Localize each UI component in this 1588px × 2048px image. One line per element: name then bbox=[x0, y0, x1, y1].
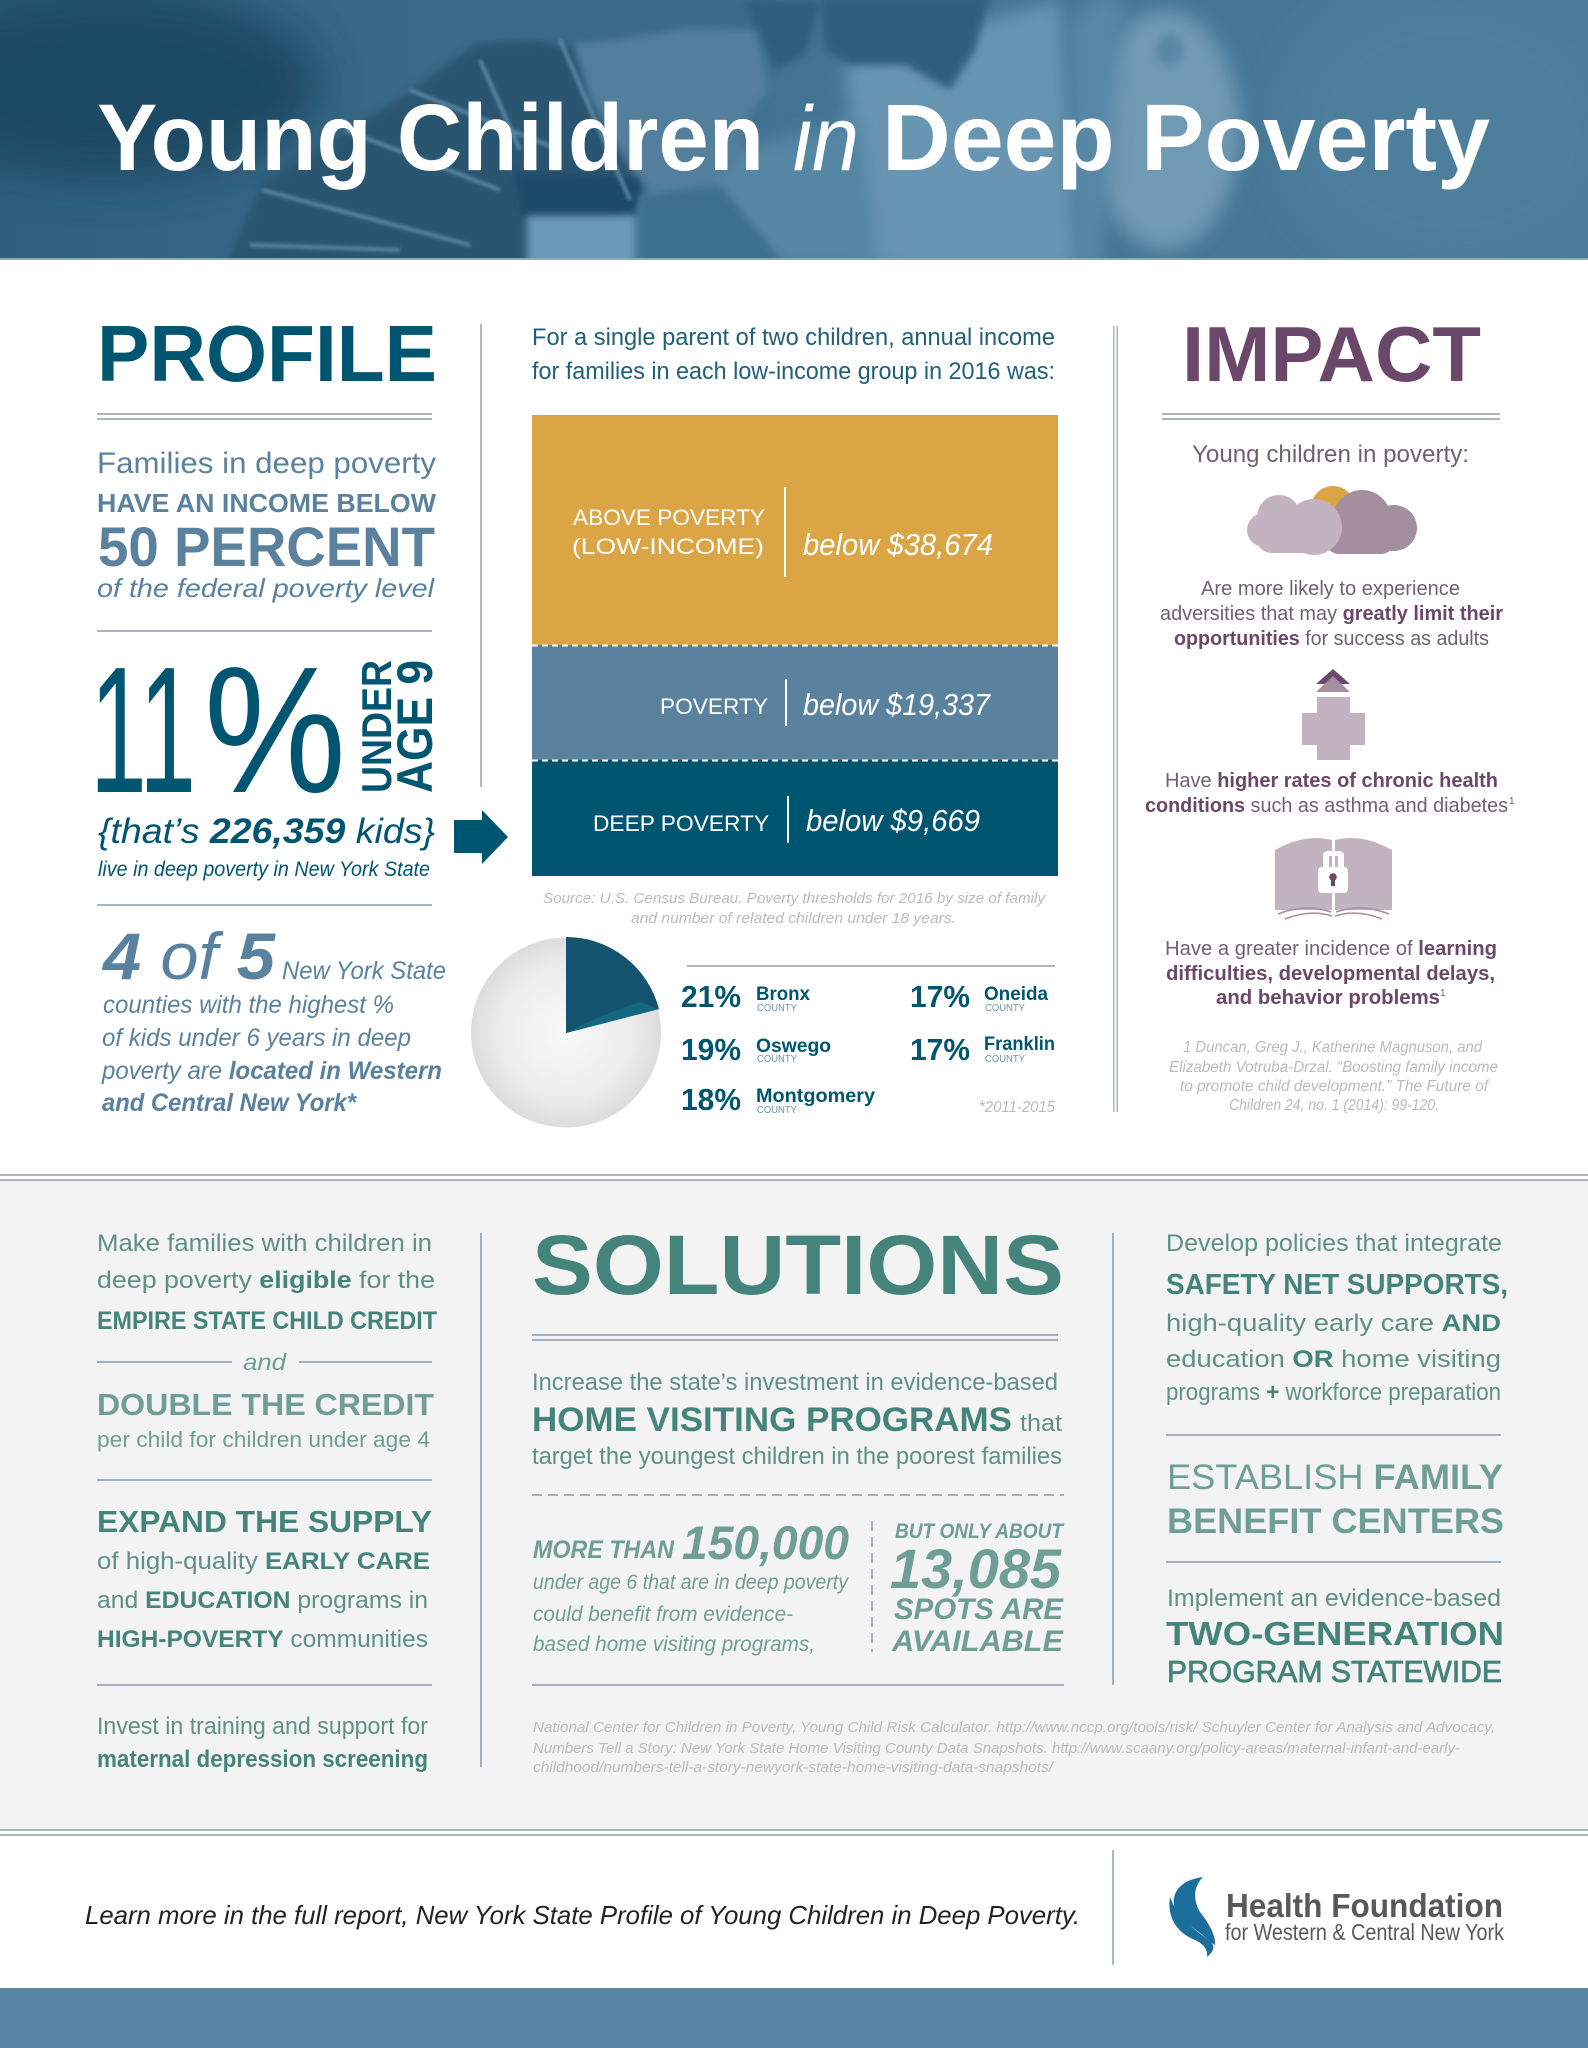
stat: 13,085: AVAILABLE bbox=[891, 1625, 1064, 1658]
big stat: 11 percent: 11 bbox=[90, 630, 196, 831]
solutions: right column bbox=[1166, 1230, 1508, 1689]
stat: 4 of 5 counties bbox=[101, 919, 446, 1117]
tax credit recommendation: and bbox=[243, 1349, 287, 1375]
learning text: difficulties, developmental delays, bbox=[1166, 962, 1495, 985]
county stats: 18% bbox=[681, 1082, 741, 1117]
footnote: Elizabeth Votruba-Drzal. “Boosting family income bbox=[1169, 1059, 1498, 1076]
county stats: Bronx bbox=[756, 984, 810, 1005]
county stats bbox=[681, 965, 1055, 1117]
chronic health text bbox=[1145, 769, 1515, 817]
title: in bbox=[793, 88, 859, 190]
big stat: 11 percent: % bbox=[204, 630, 346, 831]
adversities text: opportunities for success as adults bbox=[1174, 627, 1489, 650]
income intro bbox=[532, 324, 1055, 385]
band: deep poverty: below $9,669 bbox=[806, 803, 980, 838]
learning text: Have a greater incidence of learning bbox=[1165, 937, 1497, 960]
tax credit recommendation: per child for children under age 4 bbox=[97, 1427, 430, 1452]
tax credit recommendation bbox=[97, 1230, 437, 1452]
band: above poverty: ABOVE POVERTY bbox=[573, 505, 765, 530]
tax credit recommendation: deep poverty eligible for the bbox=[97, 1267, 435, 1294]
band: deep poverty bbox=[532, 760, 1058, 876]
county stats: Franklin bbox=[984, 1034, 1055, 1055]
panel: impact: Young children in poverty: bbox=[1192, 441, 1469, 468]
deep poverty definition: Families in deep poverty bbox=[97, 447, 436, 480]
tax credit recommendation: EMPIRE STATE CHILD CREDIT bbox=[97, 1307, 437, 1335]
references: childhood/numbers-tell-a-story-newyork-state-home-visiting-data-snapshots/ bbox=[533, 1759, 1055, 1776]
stat: 13,085: SPOTS ARE bbox=[894, 1593, 1064, 1626]
source note: Source: U.S. Census Bureau. Poverty thresholds for 2016 by size of family bbox=[543, 890, 1047, 907]
band: poverty: POVERTY bbox=[660, 694, 768, 719]
footnote bbox=[1169, 1039, 1498, 1114]
references: Numbers Tell a Story: New York State Home Visiting County Data Snapshots. http://www.scaany.org/policy-areas/maternal-infant-and-early- bbox=[533, 1740, 1460, 1757]
stat: 4 of 5 counties: counties with the highest % bbox=[103, 991, 394, 1019]
panel: solutions background bbox=[0, 1174, 1588, 1836]
expand the supply: of high-quality EARLY CARE bbox=[97, 1548, 430, 1575]
home visiting recommendation: HOME VISITING PROGRAMS bbox=[532, 1401, 1012, 1439]
county stats: 21% bbox=[681, 979, 741, 1014]
family benefit centers: ESTABLISH FAMILY bbox=[1167, 1458, 1503, 1497]
stat: 4 of 5 counties: poverty are located in Western bbox=[101, 1057, 442, 1085]
home visiting recommendation: Increase the state’s investment in evidence-based bbox=[532, 1369, 1058, 1396]
band: poverty bbox=[532, 645, 1058, 760]
two-generation program: TWO-GENERATION bbox=[1166, 1615, 1504, 1652]
heading: solutions: SOLUTIONS bbox=[532, 1218, 1064, 1312]
source note bbox=[543, 890, 1047, 927]
stat: 4 of 5 counties: of kids under 6 years in deep bbox=[102, 1024, 411, 1052]
county stats: 17% bbox=[910, 1032, 970, 1067]
learning text: 1 bbox=[1440, 988, 1446, 999]
heading: profile: PROFILE bbox=[97, 309, 437, 398]
heading: impact: IMPACT bbox=[1182, 310, 1481, 398]
big stat: 11 percent: live in deep poverty in New York State bbox=[98, 858, 430, 881]
family benefit centers bbox=[1167, 1458, 1504, 1541]
big stat: 11 percent: {that’s 226,359 kids} bbox=[98, 812, 435, 851]
county stats: Montgomery bbox=[756, 1086, 875, 1107]
references: National Center for Children in Poverty, Young Child Risk Calculator. http://www.nccp.org/tools/risk/ Schuyler Center for Analysis and Advocacy, bbox=[533, 1719, 1495, 1736]
income intro: For a single parent of two children, annual income bbox=[532, 324, 1055, 351]
stat: 150,000: could benefit from evidence- bbox=[533, 1603, 793, 1626]
learning text: and behavior problems bbox=[1216, 986, 1440, 1009]
footnote: to promote child development.” The Future of bbox=[1180, 1078, 1490, 1095]
logo: Health Foundation: Health Foundation bbox=[1226, 1887, 1503, 1924]
deep poverty definition: of the federal poverty level bbox=[97, 573, 435, 603]
chronic health text: conditions such as asthma and diabetes bbox=[1145, 794, 1508, 817]
county stats: *2011-2015 bbox=[979, 1099, 1055, 1116]
logo: Health Foundation bbox=[1169, 1877, 1504, 1957]
icon: cloud and sun bbox=[1247, 486, 1417, 555]
deep poverty definition: HAVE AN INCOME BELOW bbox=[97, 488, 436, 518]
county stats: COUNTY bbox=[757, 1054, 797, 1065]
county stats: COUNTY bbox=[757, 1003, 797, 1014]
arrow bbox=[454, 810, 508, 864]
panel: impact bbox=[1145, 310, 1515, 1114]
stat: 150,000: MORE THAN bbox=[533, 1536, 675, 1564]
safety net recommendation bbox=[1166, 1230, 1508, 1406]
depression screening: maternal depression screening bbox=[97, 1746, 428, 1773]
title: Deep Poverty bbox=[882, 85, 1490, 191]
two-generation program: PROGRAM STATEWIDE bbox=[1167, 1654, 1502, 1689]
title: Young Children bbox=[97, 85, 764, 191]
expand the supply: HIGH-POVERTY communities bbox=[97, 1626, 428, 1653]
home visiting recommendation: target the youngest children in the poorest families bbox=[532, 1443, 1062, 1470]
band: poverty: below $19,337 bbox=[803, 687, 992, 722]
family benefit centers: BENEFIT CENTERS bbox=[1167, 1502, 1504, 1541]
big stat: 11 percent bbox=[90, 630, 443, 881]
deep poverty definition: 50 PERCENT bbox=[98, 515, 435, 578]
big stat: 11 percent: UNDER bbox=[353, 660, 400, 793]
county stats: 19% bbox=[681, 1032, 741, 1067]
income intro: for families in each low-income group in 2016 was: bbox=[532, 358, 1055, 385]
depression screening: Invest in training and support for bbox=[97, 1713, 428, 1740]
footer band bbox=[0, 1988, 1588, 2048]
stat: 150,000 bbox=[533, 1516, 849, 1656]
icon: locked book bbox=[1275, 838, 1392, 919]
depression screening bbox=[97, 1713, 428, 1773]
logo: Health Foundation: for Western & Central New York bbox=[1225, 1919, 1504, 1945]
stat: 4 of 5 counties: 4 of 5 bbox=[101, 919, 276, 993]
band: above poverty: (LOW-INCOME) bbox=[572, 534, 764, 559]
safety net recommendation: Develop policies that integrate bbox=[1166, 1230, 1502, 1257]
county stats: Oneida bbox=[984, 984, 1048, 1005]
pie chart bbox=[471, 937, 661, 1128]
panel: profile bbox=[90, 309, 446, 1117]
footnote: Children 24, no. 1 (2014): 99-120. bbox=[1229, 1097, 1439, 1114]
county stats: COUNTY bbox=[985, 1003, 1025, 1014]
band: above poverty bbox=[532, 415, 1058, 645]
band: above poverty: below $38,674 bbox=[803, 527, 993, 562]
deep poverty definition bbox=[97, 447, 436, 603]
tax credit recommendation: Make families with children in bbox=[97, 1230, 432, 1257]
big stat: 11 percent: AGE 9 bbox=[387, 660, 443, 793]
expand the supply: EXPAND THE SUPPLY bbox=[97, 1504, 432, 1539]
title bbox=[97, 85, 1490, 191]
chronic health text: Have higher rates of chronic health bbox=[1165, 769, 1498, 792]
solutions: left column bbox=[97, 1230, 437, 1773]
safety net recommendation: high-quality early care AND bbox=[1166, 1310, 1501, 1337]
stat: 150,000: 150,000 bbox=[682, 1516, 849, 1569]
source note: and number of related children under 18 years. bbox=[631, 910, 956, 927]
adversities text: adversities that may greatly limit their bbox=[1160, 602, 1503, 625]
stat: 150,000: based home visiting programs, bbox=[533, 1633, 815, 1656]
panel: income groups bbox=[532, 324, 1058, 927]
tax credit recommendation: DOUBLE THE CREDIT bbox=[97, 1387, 434, 1422]
references bbox=[533, 1719, 1495, 1776]
expand the supply: and EDUCATION programs in bbox=[97, 1587, 428, 1614]
learning text bbox=[1165, 937, 1497, 1009]
expand the supply bbox=[97, 1504, 432, 1653]
county stats: Oswego bbox=[756, 1036, 831, 1057]
safety net recommendation: education OR home visiting bbox=[1166, 1346, 1501, 1373]
footer call to action: Learn more in the full report, New York State Profile of Young Children in Deep Poverty. bbox=[85, 1900, 1080, 1930]
home visiting recommendation: that bbox=[1020, 1410, 1062, 1437]
stat: 150,000: under age 6 that are in deep poverty bbox=[533, 1571, 849, 1594]
band: deep poverty: DEEP POVERTY bbox=[593, 811, 769, 836]
home visiting recommendation bbox=[532, 1369, 1062, 1470]
solutions: centre column bbox=[532, 1218, 1495, 1776]
stat: 4 of 5 counties: New York State bbox=[282, 957, 446, 985]
icon: health cross with arrow bbox=[1302, 669, 1365, 760]
two-generation program bbox=[1166, 1585, 1504, 1689]
two-generation program: Implement an evidence-based bbox=[1167, 1585, 1501, 1612]
stat: 4 of 5 counties: and Central New York* bbox=[102, 1089, 357, 1117]
stat: 13,085: BUT ONLY ABOUT bbox=[895, 1520, 1065, 1543]
adversities text: Are more likely to experience bbox=[1201, 577, 1460, 600]
stat: 13,085: 13,085 bbox=[890, 1537, 1062, 1600]
header banner with photo of children bbox=[0, 0, 1588, 271]
safety net recommendation: SAFETY NET SUPPORTS, bbox=[1166, 1269, 1508, 1301]
chronic health text: 1 bbox=[1509, 796, 1515, 807]
safety net recommendation: programs + workforce preparation bbox=[1166, 1379, 1501, 1406]
county stats: COUNTY bbox=[757, 1105, 797, 1116]
county stats: 17% bbox=[910, 979, 970, 1014]
adversities text bbox=[1160, 577, 1503, 650]
county stats: COUNTY bbox=[985, 1054, 1025, 1065]
stat: 13,085 bbox=[890, 1520, 1065, 1658]
footnote: 1 Duncan, Greg J., Katherine Magnuson, and bbox=[1183, 1039, 1483, 1056]
